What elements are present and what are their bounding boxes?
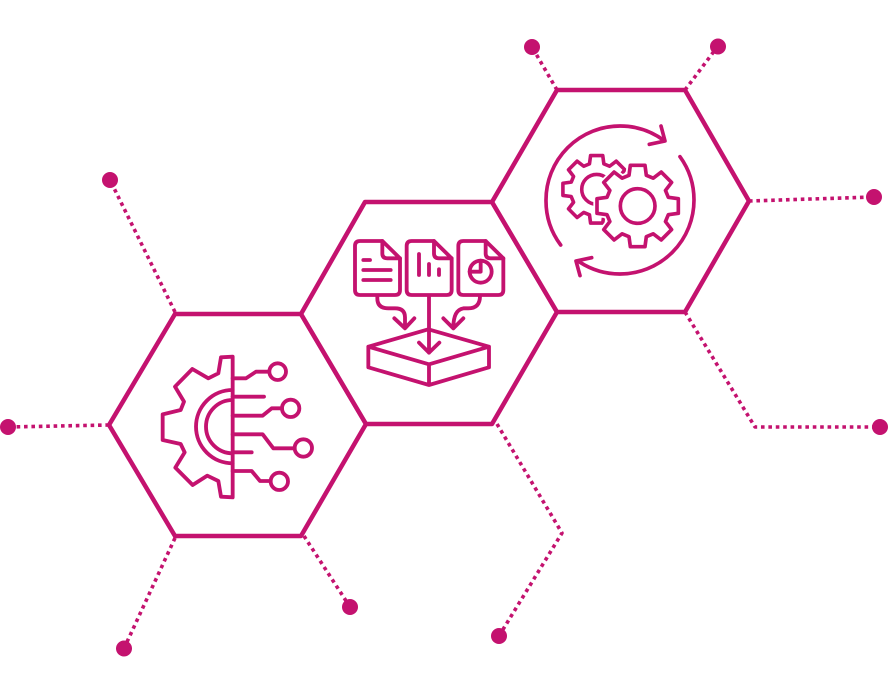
arrow: middle document to box: [419, 296, 439, 353]
connector: left hexagon to upper left dot: [102, 172, 175, 312]
connector: left hexagon to lower right dot: [304, 536, 358, 615]
icon: documents flowing into a box: [355, 241, 503, 385]
small gear: [563, 156, 630, 223]
hexagon: right: [492, 90, 749, 312]
hexagon: left: [109, 314, 366, 536]
connector: left hexagon to lower left dot: [116, 538, 175, 656]
big gear: [597, 165, 678, 247]
document with text lines: [355, 241, 400, 295]
cycle arrow: upper: [546, 126, 665, 245]
connector: right hexagon to lower right dot: [685, 312, 888, 435]
connector: middle hexagon to bottom dot: [491, 424, 562, 644]
box: [368, 329, 489, 385]
arrow: left document to box: [377, 296, 414, 328]
connector: right hexagon to upper left dot: [524, 39, 557, 90]
document with bar chart: [407, 241, 452, 295]
icon: gears inside cycle arrows: [546, 126, 694, 276]
connector: left hexagon to far left dot: [0, 419, 109, 435]
hexagon: middle: [301, 202, 557, 424]
connector: right hexagon to upper right dot: [685, 38, 726, 90]
connector: right hexagon to right dot: [749, 189, 882, 205]
arrow: right document to box: [443, 296, 480, 328]
document with pie chart: [458, 241, 503, 295]
cycle arrow: lower: [576, 157, 694, 276]
icon: half gear with circuit branches: [163, 357, 312, 497]
